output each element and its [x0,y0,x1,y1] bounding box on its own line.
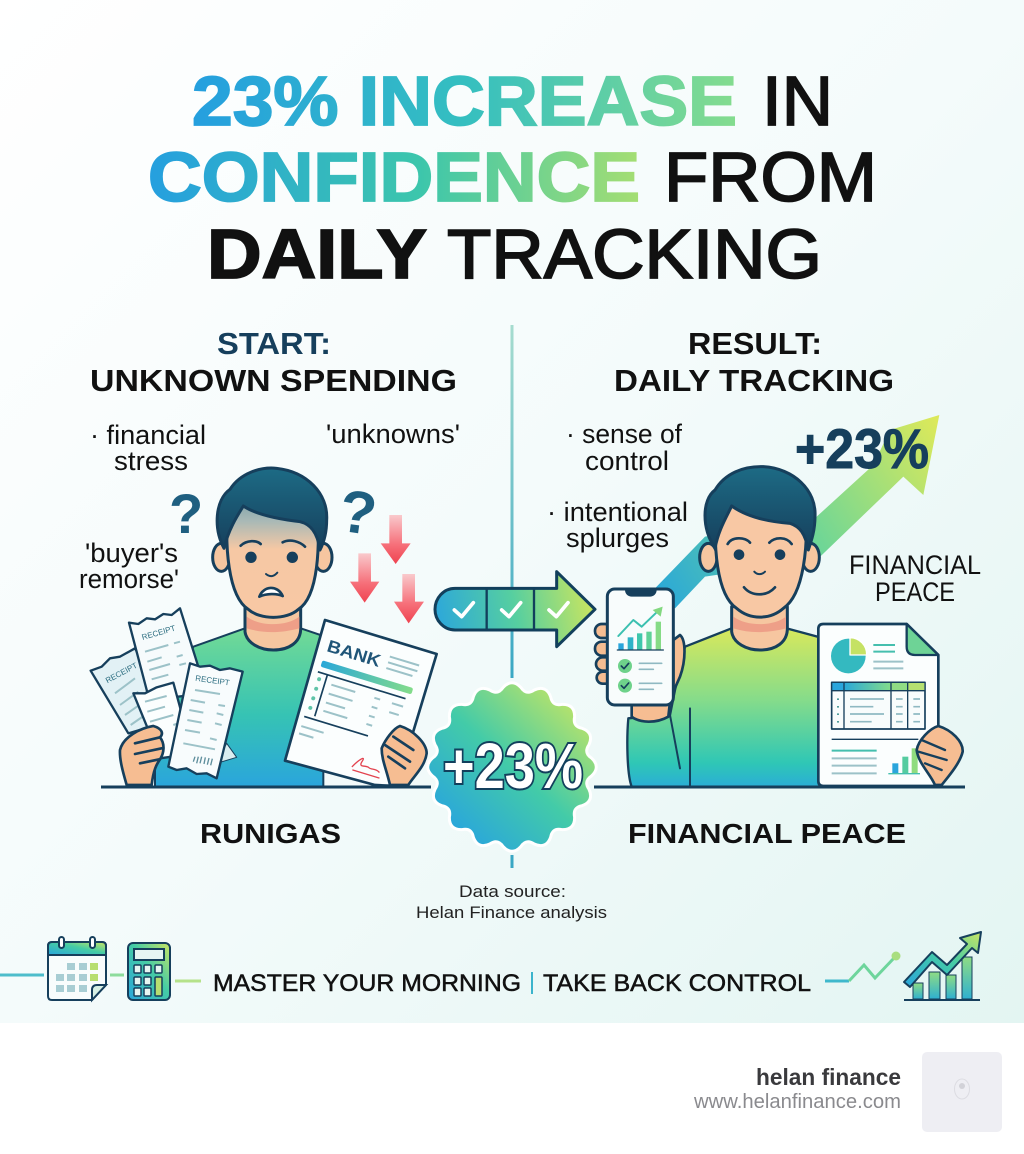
logo box [922,1052,1002,1132]
phone checklist [618,659,662,693]
receipt right [168,663,243,778]
face [715,500,806,617]
label: financial stress [90,420,206,476]
heading: start unknown spending [90,326,457,398]
receipt back top: RECEIPT [141,624,177,642]
title: FROM [664,138,877,216]
happy expression [728,538,792,594]
label: runigas: RUNIGAS [200,818,341,849]
title: TRACKING [447,215,822,293]
neck shadow [247,617,299,632]
title: 23% INCREASE [192,62,737,140]
worried expression [241,541,305,597]
heading: start unknown spending: START: [217,326,331,361]
label: intentional splurges: splurges [566,523,669,553]
icon: red falling arrows [350,515,424,623]
icon: question mark left: ? [169,482,203,545]
footer panel [0,1023,1024,1154]
receipt back left [91,648,173,733]
icon: question mark right: ? [335,477,381,548]
title: IN [762,62,833,140]
label: financial peace: FINANCIAL PEACE [628,818,906,849]
hair [217,468,327,550]
illustration: confident person [627,467,820,787]
heading: result daily tracking: DAILY TRACKING [614,363,894,398]
icon: calculator [128,943,170,1000]
phone chart [617,607,663,650]
shirt [627,628,820,787]
receipt right: RECEIPT [195,674,230,687]
icon: hands holding documents [120,726,427,785]
heading: result daily tracking [614,326,894,398]
data source note: Helan Finance analysis [416,903,607,922]
label: financial peace right: FINANCIAL [849,550,981,580]
label: buyer's remorse: remorse' [79,564,179,594]
title: CONFIDENCE [148,138,640,216]
paper corner [217,743,237,763]
progress arrow with checks [435,572,595,647]
icon: growth chart [904,932,981,1001]
illustration: bank statement [285,620,437,786]
label: sense of control: · sense of [566,419,682,449]
center divider line [510,325,514,868]
badge +23% [429,684,595,850]
data source note: Data source: [459,882,566,901]
label: sense of control [566,419,682,476]
tagline [213,970,811,997]
face [227,500,318,617]
tagline: TAKE BACK CONTROL [543,970,811,997]
ears [700,543,819,571]
label: financial stress: · financial [90,420,206,450]
neck [732,607,787,650]
left ground line [101,786,431,788]
label: sense of control: control [585,446,669,476]
heading: start unknown spending: UNKNOWN SPENDING [90,363,457,398]
hair [705,467,815,550]
data source note [416,882,607,922]
heading: result daily tracking: RESULT: [688,326,822,361]
pie chart [831,638,867,673]
label: buyer's remorse: 'buyer's [85,538,178,568]
connector zigzag right [825,952,900,981]
label: financial peace right [849,550,981,607]
label: intentional splurges [547,497,688,553]
label: intentional splurges: · intentional [547,497,688,527]
big +23% label: +23% [795,417,929,480]
badge text: +23% [443,730,583,802]
arm folds [670,708,690,787]
receipt back top [129,608,207,700]
mini bar chart [888,748,920,774]
shirt [155,628,323,787]
illustration: bank statement: BANK [325,636,384,671]
label: financial peace right: PEACE [875,577,955,607]
illustration: financial report document [818,624,963,786]
label: buyer's remorse [79,538,179,594]
hand fingers [595,624,684,722]
brand name: helan finance [756,1064,901,1090]
label: unknowns: 'unknowns' [326,419,460,449]
tagline: MASTER YOUR MORNING [213,970,521,997]
icon: calendar [48,937,106,1000]
title: DAILY [207,215,427,293]
illustration: receipts [91,608,243,778]
phone body [607,589,673,705]
big rising arrow [655,415,939,608]
brand url: www.helanfinance.com [693,1091,901,1113]
illustration: worried person [155,468,332,787]
neck shadow [733,617,786,632]
receipt back left: RECEIPT [104,661,139,685]
connector lines left [0,974,201,982]
icon: phone with chart [595,589,684,722]
ears [213,543,332,571]
label: financial stress: stress [114,446,188,476]
title [148,62,877,293]
data table [832,682,925,729]
right ground line [594,786,965,788]
receipt small front [133,683,192,758]
hand [917,726,963,785]
neck [245,607,301,650]
